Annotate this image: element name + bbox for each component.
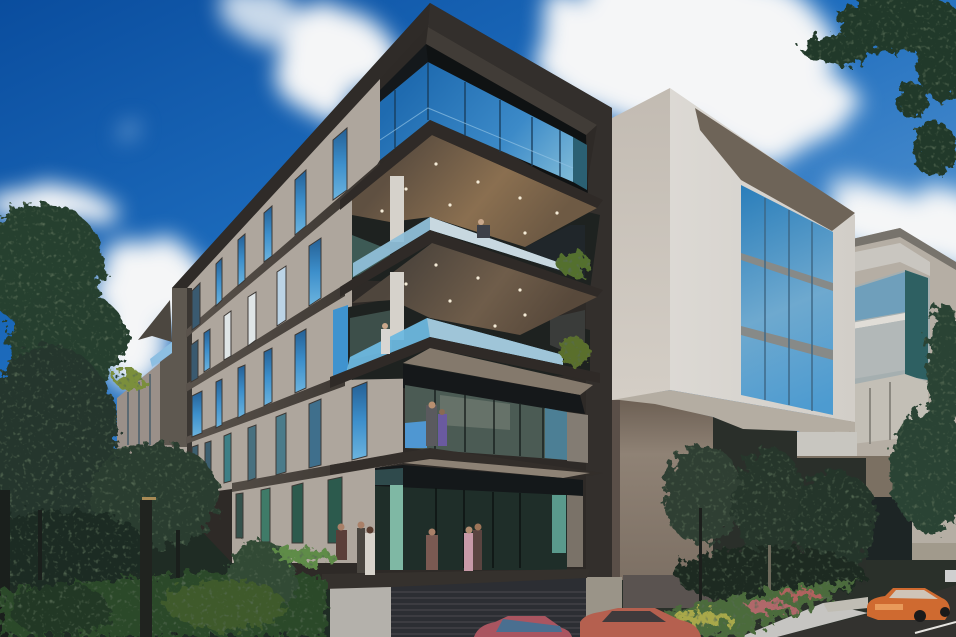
clouds [0,0,956,394]
planter [558,251,590,277]
slab [330,337,600,388]
windows row 1 [333,128,347,200]
glazing [741,185,833,415]
person [477,219,490,238]
planter [558,338,590,366]
facade wall [172,24,430,563]
column [390,176,404,242]
people [426,402,447,446]
ceiling lights [404,263,527,328]
main building right side: dark frame [380,3,612,577]
foreground hedge [0,540,335,637]
glass balustrade [353,217,560,277]
slab [330,448,603,476]
lower soffit [612,390,855,432]
terrace level two [330,243,600,388]
people [426,524,482,571]
main building left facade [172,3,612,590]
soffit [403,348,593,395]
glass balustrade [345,318,563,377]
ground backing behind trees [0,470,956,637]
podium with garage door [322,569,590,637]
right white block [612,88,855,432]
parked white car [945,570,956,582]
windows [191,128,367,543]
trees under block [663,445,877,603]
windows row 4 [352,382,367,460]
interior [335,290,590,380]
lamp posts [699,508,771,620]
top right tree [802,0,956,178]
glass [405,385,567,460]
street and pavement [740,585,956,637]
floor bands [186,162,380,338]
right foreground tree [890,303,956,532]
middle red car [580,608,701,637]
lamp post [140,497,156,637]
left red car [474,616,572,637]
top floor glazing [380,62,587,190]
wall below block [585,400,866,637]
roof band [172,3,430,288]
tree trunks [0,490,180,637]
flower beds [665,578,860,637]
windows row 3 [295,329,306,393]
left trees [0,203,220,590]
level three glazed floor [330,348,603,478]
side face [670,88,855,422]
windows row 5 [328,477,342,543]
ground floor glazing [375,465,583,571]
windows row 2 [309,238,321,306]
people on terrace [336,522,375,575]
distant left wing [115,300,172,455]
front face [612,88,670,401]
dark head [403,364,585,414]
upper soffit [695,108,855,231]
ceiling lights [380,162,559,235]
column [390,272,404,340]
cars [474,570,956,637]
interior [352,170,600,290]
terrace level one [340,120,603,297]
background building right [797,228,956,580]
slab [340,230,603,297]
orange car [867,588,950,622]
backing [172,3,612,590]
slab [340,120,603,210]
soffit [352,243,597,335]
soffit [352,135,597,247]
person [381,323,390,354]
